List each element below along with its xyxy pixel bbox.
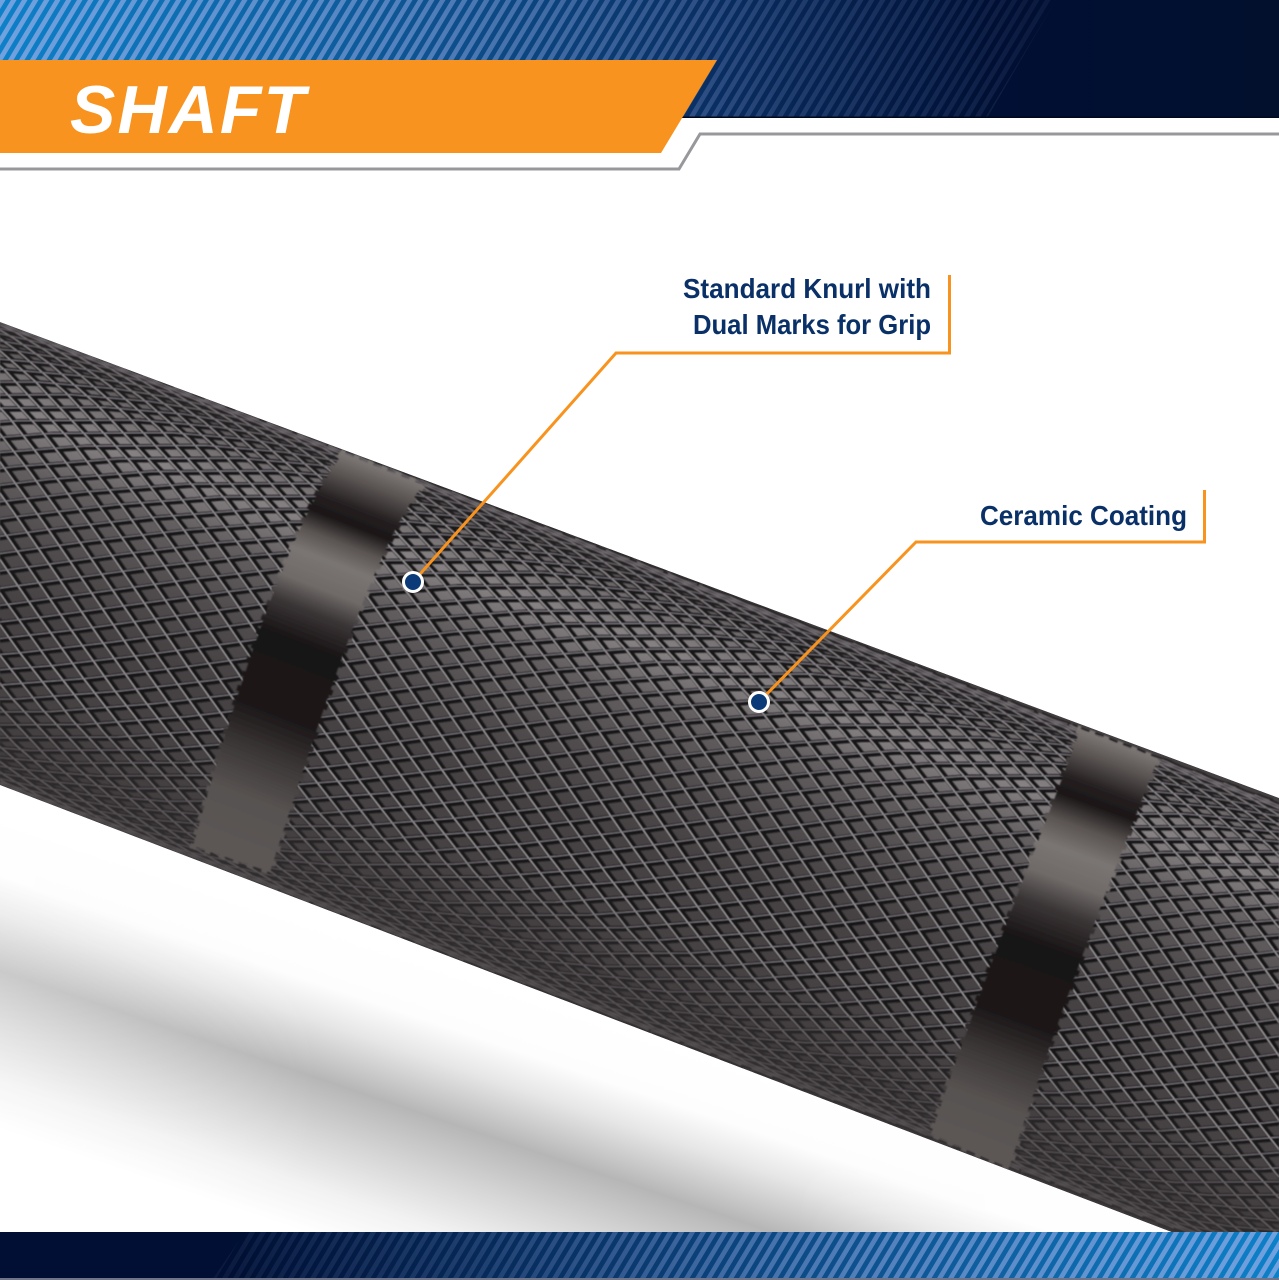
callout: standard knurl: Standard Knurl with bbox=[683, 273, 931, 304]
barbell shaft bbox=[0, 322, 1279, 1273]
white header gap bbox=[0, 118, 1279, 167]
footer strip bbox=[0, 1232, 1279, 1280]
smooth grip mark right bbox=[931, 729, 1158, 1168]
smooth grip mark left bbox=[193, 453, 423, 872]
floor shadow bbox=[0, 780, 1279, 1232]
orange title banner bbox=[0, 60, 717, 153]
callout: ceramic coating: Ceramic Coating bbox=[980, 500, 1187, 531]
callout: ceramic coating bbox=[750, 490, 1204, 712]
cylinder shading bbox=[0, 322, 1279, 1273]
header outline bbox=[0, 134, 1279, 169]
callout: standard knurl bbox=[404, 273, 950, 592]
knurled surface bbox=[0, 322, 1279, 1273]
title: SHAFT bbox=[70, 72, 310, 148]
header strip bbox=[0, 0, 1279, 118]
callout: standard knurl: Dual Marks for Grip bbox=[693, 309, 931, 340]
